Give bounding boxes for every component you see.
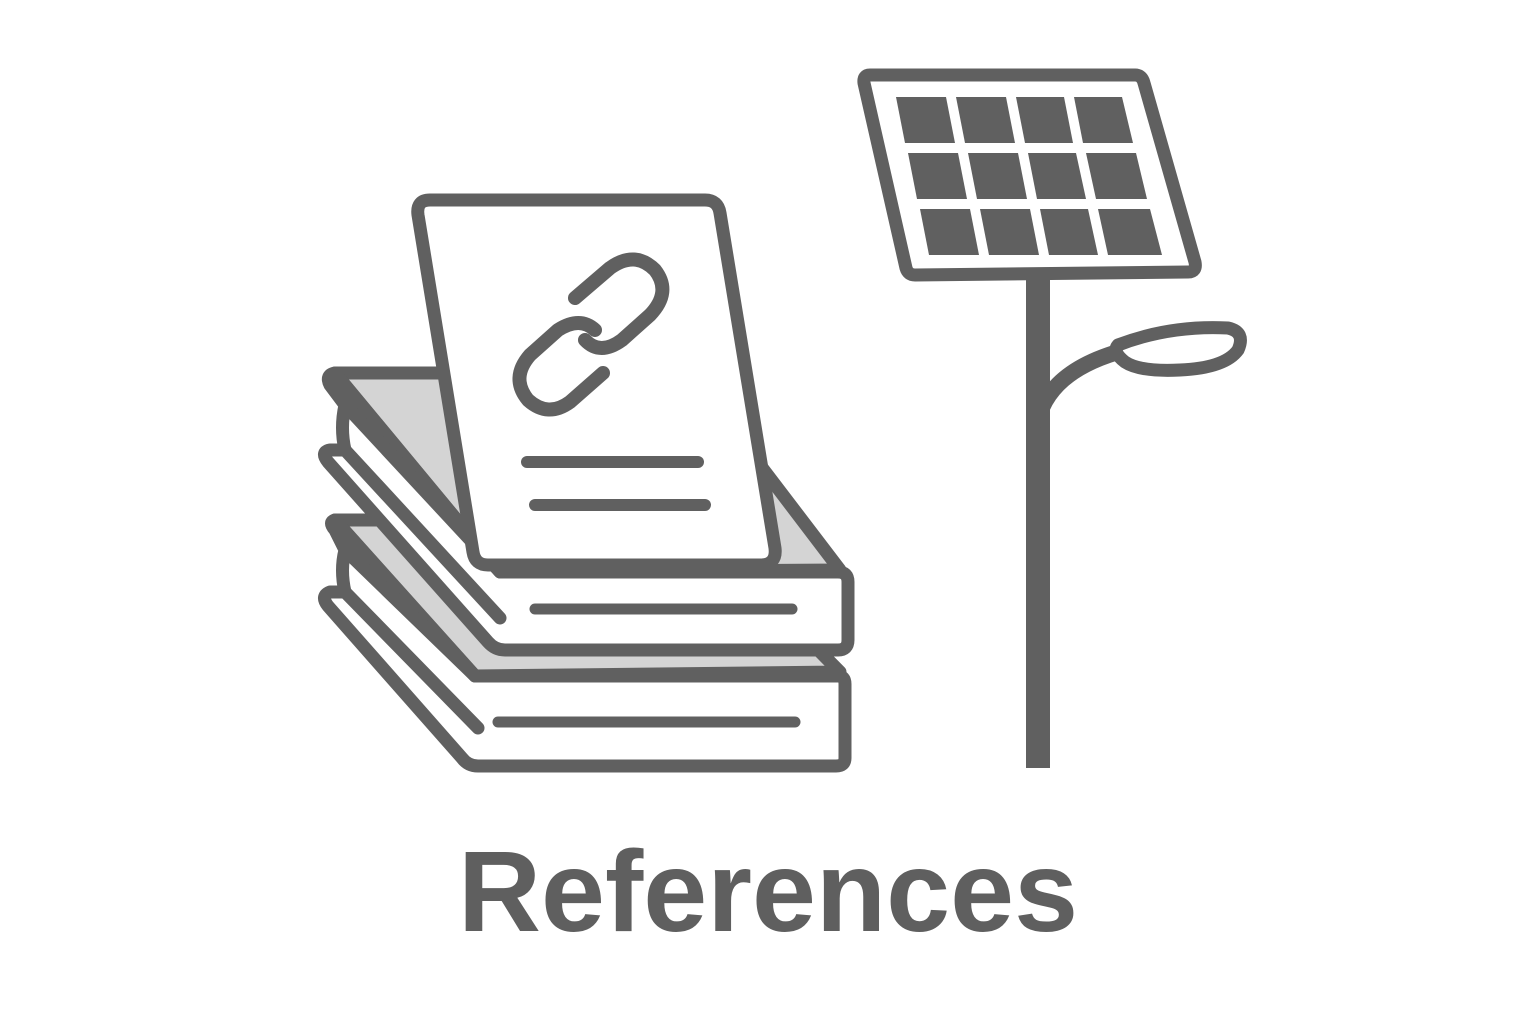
title: References xyxy=(458,828,1078,956)
icon: solar street lamp xyxy=(864,75,1240,768)
icon: document with link xyxy=(418,200,775,565)
bottom book xyxy=(324,520,845,766)
arm xyxy=(1038,350,1125,420)
lamp head xyxy=(1116,328,1240,370)
solar panel xyxy=(864,75,1195,275)
pole xyxy=(1026,280,1050,768)
link chain xyxy=(519,259,662,410)
icon: book stack xyxy=(324,373,848,766)
top book xyxy=(324,373,848,650)
